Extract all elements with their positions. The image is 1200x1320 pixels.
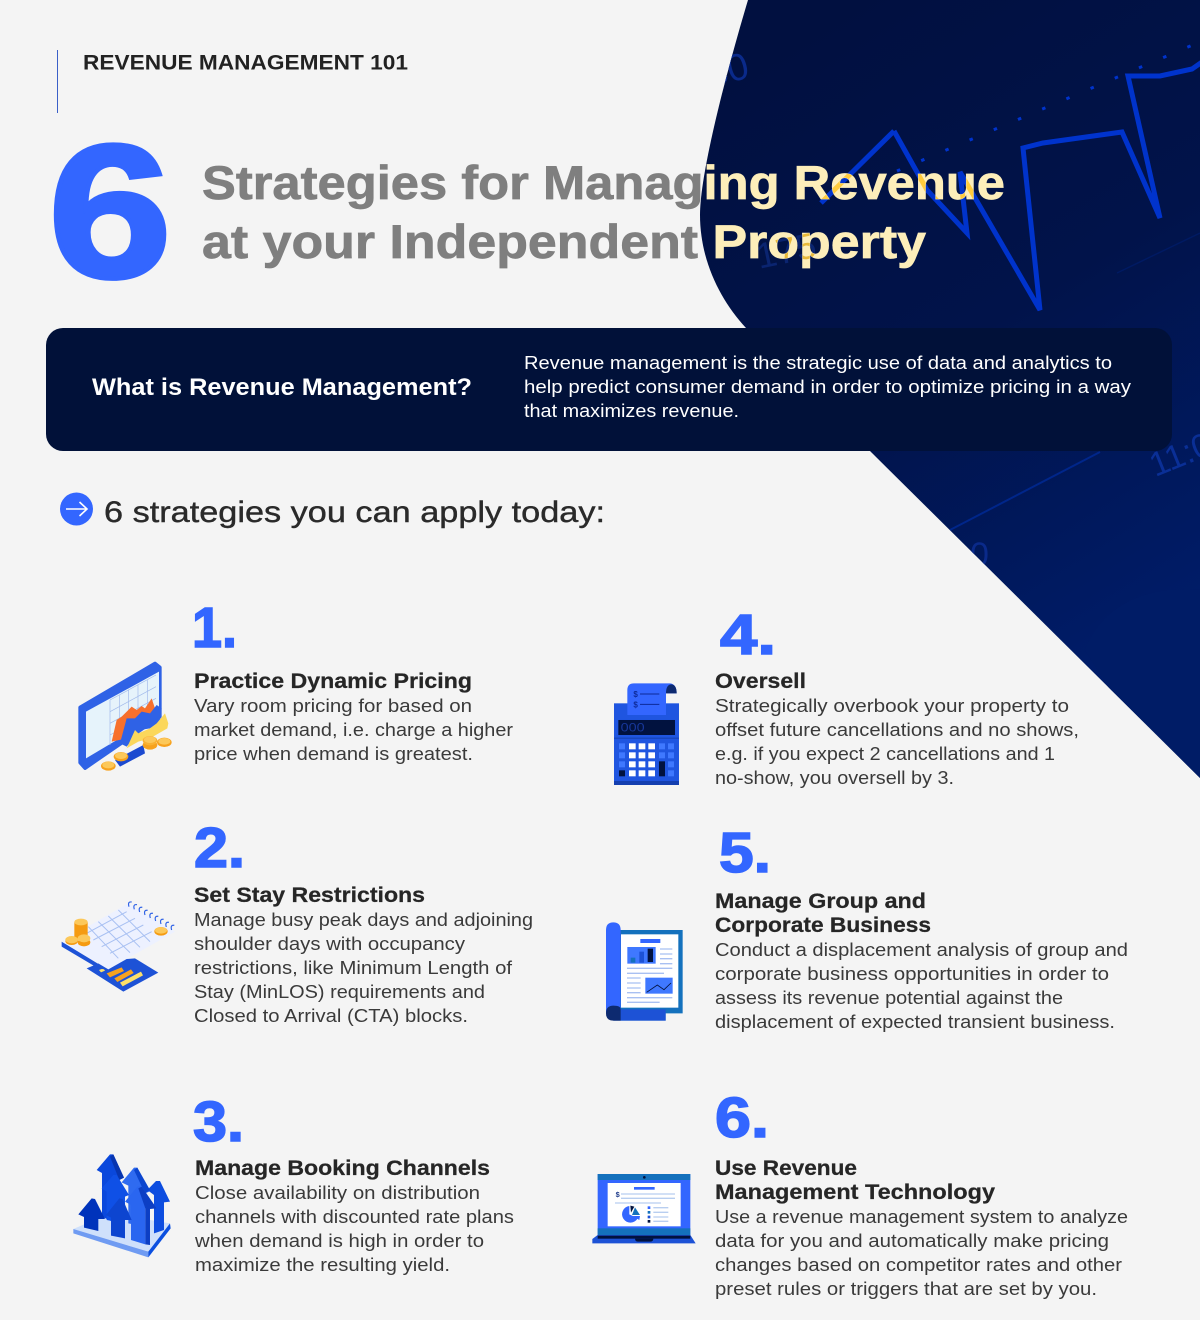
body text xyxy=(194,1182,514,1275)
body text xyxy=(715,695,1079,788)
body text: market demand, i.e. charge a higher xyxy=(194,719,513,740)
body text: data for you and automatically make pricing xyxy=(715,1230,1109,1251)
strategy 2 xyxy=(62,816,533,1026)
title: Strategies for Managing Revenue xyxy=(202,156,1005,209)
strategy 5 xyxy=(606,821,1128,1032)
body text: maximize the resulting yield. xyxy=(195,1254,450,1275)
body text: assess its revenue potential against the xyxy=(715,987,1063,1008)
body text: Close availability on distribution xyxy=(195,1182,480,1203)
body text: channels with discounted rate plans xyxy=(195,1206,514,1227)
eyebrow label: REVENUE MANAGEMENT 101 xyxy=(83,50,408,74)
body text xyxy=(715,1206,1128,1299)
heading: Set Stay Restrictions xyxy=(194,883,425,907)
body text: Conduct a displacement analysis of group and xyxy=(715,939,1128,960)
body text: when demand is high in order to xyxy=(194,1230,484,1251)
dark chart backdrop shape: 0 xyxy=(970,536,989,574)
panel definition text: that maximizes revenue. xyxy=(524,400,739,421)
body text: offset future cancellations and no shows, xyxy=(715,719,1079,740)
icon: calculator: $ xyxy=(633,700,638,709)
body text xyxy=(194,909,533,1026)
icon: rising arrows xyxy=(73,1154,171,1257)
icon: report document xyxy=(606,922,683,1021)
number 5: 5. xyxy=(719,821,771,885)
title: Strategies for Managing Revenue xyxy=(202,156,1005,209)
icon: calculator xyxy=(614,683,679,785)
body text: e.g. if you expect 2 cancellations and 1 xyxy=(715,743,1055,764)
body text: displacement of expected transient business. xyxy=(715,1011,1115,1032)
heading: Manage Booking Channels xyxy=(195,1156,490,1180)
heading xyxy=(715,889,931,937)
strategy 3 xyxy=(73,1090,514,1275)
dark chart backdrop shape: 50 xyxy=(702,45,753,97)
icon: laptop dashboard xyxy=(592,1174,696,1243)
number 1: 1. xyxy=(192,596,237,660)
body text xyxy=(715,939,1128,1032)
body text: preset rules or triggers that are set by you. xyxy=(715,1278,1097,1299)
strategy 4 xyxy=(614,603,1079,788)
strategy 6 xyxy=(592,1086,1128,1299)
heading xyxy=(715,1156,995,1204)
body text: Use a revenue management system to analyze xyxy=(715,1206,1128,1227)
heading: Corporate Business xyxy=(715,913,931,937)
big number 6: 6 xyxy=(48,106,172,318)
body text: Closed to Arrival (CTA) blocks. xyxy=(194,1005,468,1026)
number 6: 6. xyxy=(715,1086,769,1150)
body text xyxy=(194,695,513,764)
title: at your Independent Property xyxy=(202,215,926,268)
body text: corporate business opportunities in order to xyxy=(715,963,1109,984)
heading: Practice Dynamic Pricing xyxy=(194,669,472,693)
title: 175 xyxy=(752,224,820,277)
icon: calculator: $ xyxy=(633,690,638,699)
title: at your Independent Property xyxy=(202,215,926,268)
icon: arrow circle xyxy=(60,492,93,526)
heading: Use Revenue xyxy=(715,1156,857,1180)
body text: no-show, you oversell by 3. xyxy=(715,767,954,788)
icon: laptop dashboard: $ xyxy=(616,1190,620,1199)
number 4: 4. xyxy=(720,603,776,667)
accent vertical rule xyxy=(57,50,58,113)
icon: monitor chart xyxy=(80,663,172,771)
body text: changes based on competitor rates and other xyxy=(715,1254,1122,1275)
panel definition text xyxy=(524,352,1132,421)
title xyxy=(203,164,1004,268)
body text: Manage busy peak days and adjoining xyxy=(194,909,533,930)
heading: Manage Group and xyxy=(715,889,926,913)
body text: Strategically overbook your property to xyxy=(715,695,1069,716)
section heading: 6 strategies you can apply today: xyxy=(104,496,605,529)
panel definition text: Revenue management is the strategic use of data and analytics to xyxy=(524,352,1112,373)
number 2: 2. xyxy=(194,816,245,880)
dark chart backdrop shape: 175 xyxy=(752,224,820,277)
strategy 1 xyxy=(80,596,513,771)
panel definition text: help predict consumer demand in order to optimize pricing in a way xyxy=(524,376,1132,397)
body text: price when demand is greatest. xyxy=(194,743,473,764)
body text: Vary room pricing for based on xyxy=(194,695,472,716)
dark chart backdrop shape xyxy=(690,0,1200,790)
panel: what is revenue management xyxy=(46,328,1172,451)
panel heading: What is Revenue Management? xyxy=(92,374,472,401)
body text: Stay (MinLOS) requirements and xyxy=(194,981,485,1002)
heading: Oversell xyxy=(715,669,806,693)
body text: shoulder days with occupancy xyxy=(194,933,466,954)
heading: Management Technology xyxy=(715,1180,995,1204)
icon: calendar xyxy=(62,902,175,992)
icon: calculator: 000 xyxy=(621,721,645,735)
body text: restrictions, like Minimum Length of xyxy=(194,957,513,978)
number 3: 3. xyxy=(193,1090,244,1154)
